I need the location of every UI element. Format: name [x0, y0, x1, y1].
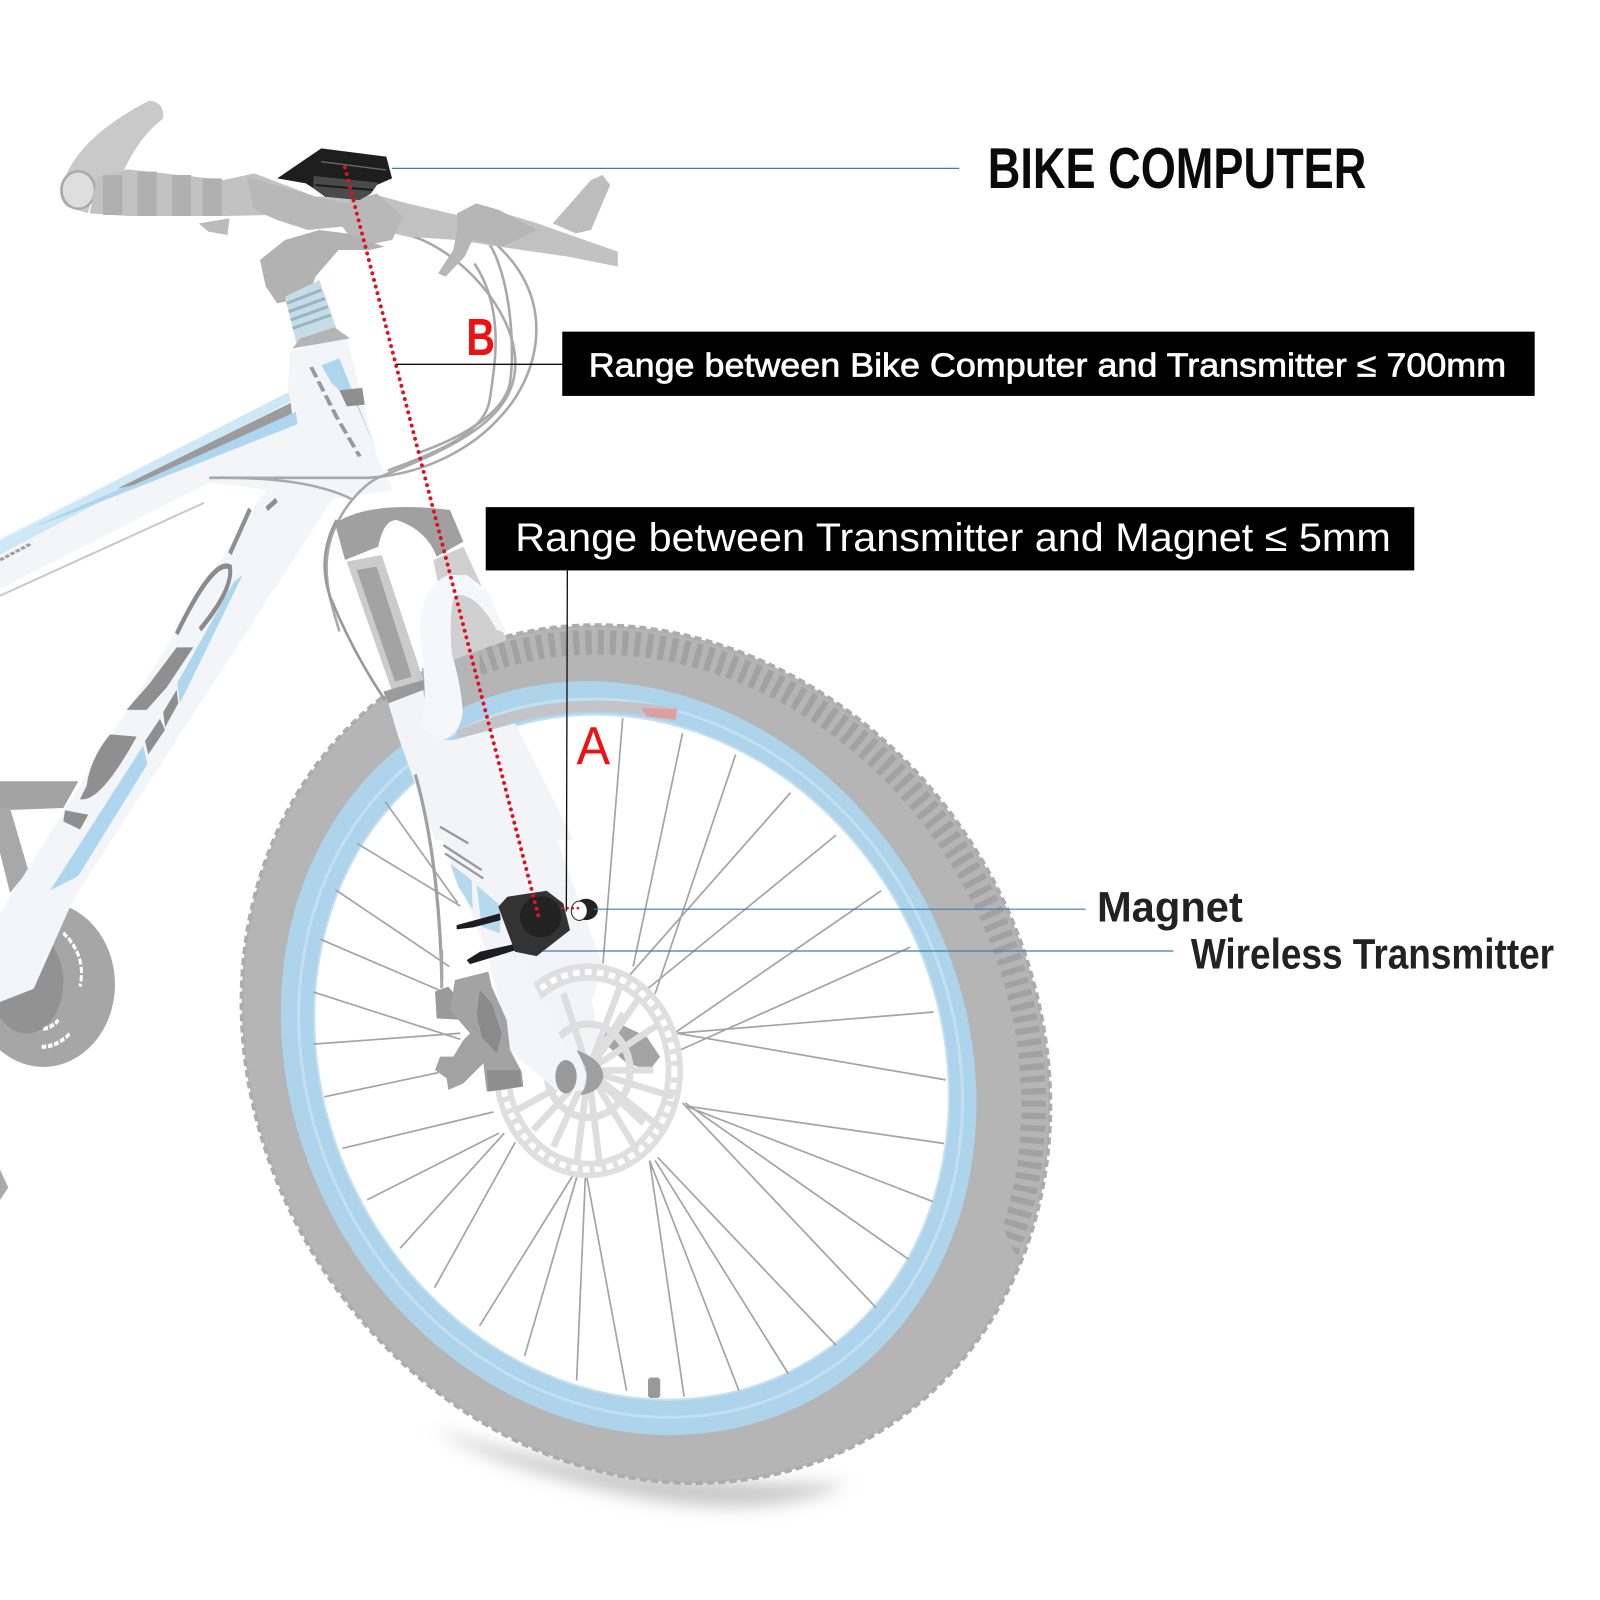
- leader: range B: [396, 363, 562, 365]
- fork decals: [440, 827, 500, 933]
- wireless transmitter device: [457, 891, 570, 964]
- fork end: [488, 957, 587, 1093]
- chainring and pedal: [0, 781, 115, 1200]
- right horn: [553, 175, 610, 233]
- dust seal: [383, 680, 425, 703]
- hub: [577, 1050, 603, 1095]
- rim decal: [458, 706, 677, 736]
- brake cables: [209, 231, 536, 631]
- leader: bike computer: [392, 167, 959, 169]
- callout: range 5mm: Range between Transmitter and Magnet ≤ 5mm: [515, 516, 1391, 560]
- spokes: [313, 718, 946, 1397]
- top tube stripes: [0, 358, 377, 596]
- cable: [325, 520, 385, 700]
- rim: [150, 558, 1107, 1558]
- lower blade: [388, 690, 573, 840]
- fork arch: [420, 575, 507, 740]
- label: A: A: [577, 716, 610, 776]
- fork: [325, 507, 573, 840]
- caliper: [435, 987, 465, 1020]
- handlebar: [60, 101, 618, 348]
- label: B: B: [466, 309, 495, 367]
- callout: range 700mm: Range between Bike Computer and Transmitter ≤ 700mm: [589, 348, 1506, 385]
- heading: bike computer: BIKE COMPUTER: [988, 137, 1366, 201]
- front wheel: [240, 623, 1052, 1485]
- leader: range A: [566, 570, 567, 911]
- range A red dotted line: [562, 907, 582, 909]
- left stanchion: [347, 555, 423, 690]
- rim inner: [196, 602, 1068, 1512]
- magnet: [571, 899, 598, 920]
- right brake lever: [438, 203, 537, 277]
- frame tubes: [0, 334, 393, 1002]
- fork blade: [416, 724, 603, 1091]
- rotor ring: [502, 972, 674, 1169]
- ground shadow: [434, 1429, 847, 1506]
- head spring: [285, 280, 337, 343]
- down tube decals: [50, 500, 277, 891]
- disc brake: [435, 950, 674, 1169]
- tyre tread: [480, 630, 1046, 1255]
- leader: wireless transmitter: [543, 950, 1173, 952]
- label: magnet: Magnet: [1097, 883, 1243, 931]
- label: wireless transmitter: Wireless Transmitter: [1191, 930, 1554, 978]
- lower brake cable: [415, 774, 442, 980]
- tyre: [82, 472, 1210, 1600]
- fork right stanchion: [433, 547, 507, 660]
- stem: [260, 230, 384, 303]
- clamp: [247, 177, 404, 247]
- grip shading: [113, 172, 212, 216]
- left horn grip: [60, 101, 163, 213]
- range B red dotted line: [345, 167, 539, 917]
- bike frame: [0, 334, 393, 1002]
- fork crown: [335, 507, 463, 560]
- caliper cable: [437, 950, 446, 988]
- left small lever: [199, 218, 229, 235]
- rim grooves: [174, 582, 1087, 1535]
- callout: range 700mm: [562, 332, 1535, 396]
- handlebar tube: [90, 169, 618, 267]
- leader: magnet: [594, 908, 1086, 910]
- valve: [648, 1378, 660, 1398]
- bike computer device: [277, 148, 392, 200]
- callout: range 5mm: [486, 507, 1414, 570]
- rotor back: [602, 1024, 660, 1070]
